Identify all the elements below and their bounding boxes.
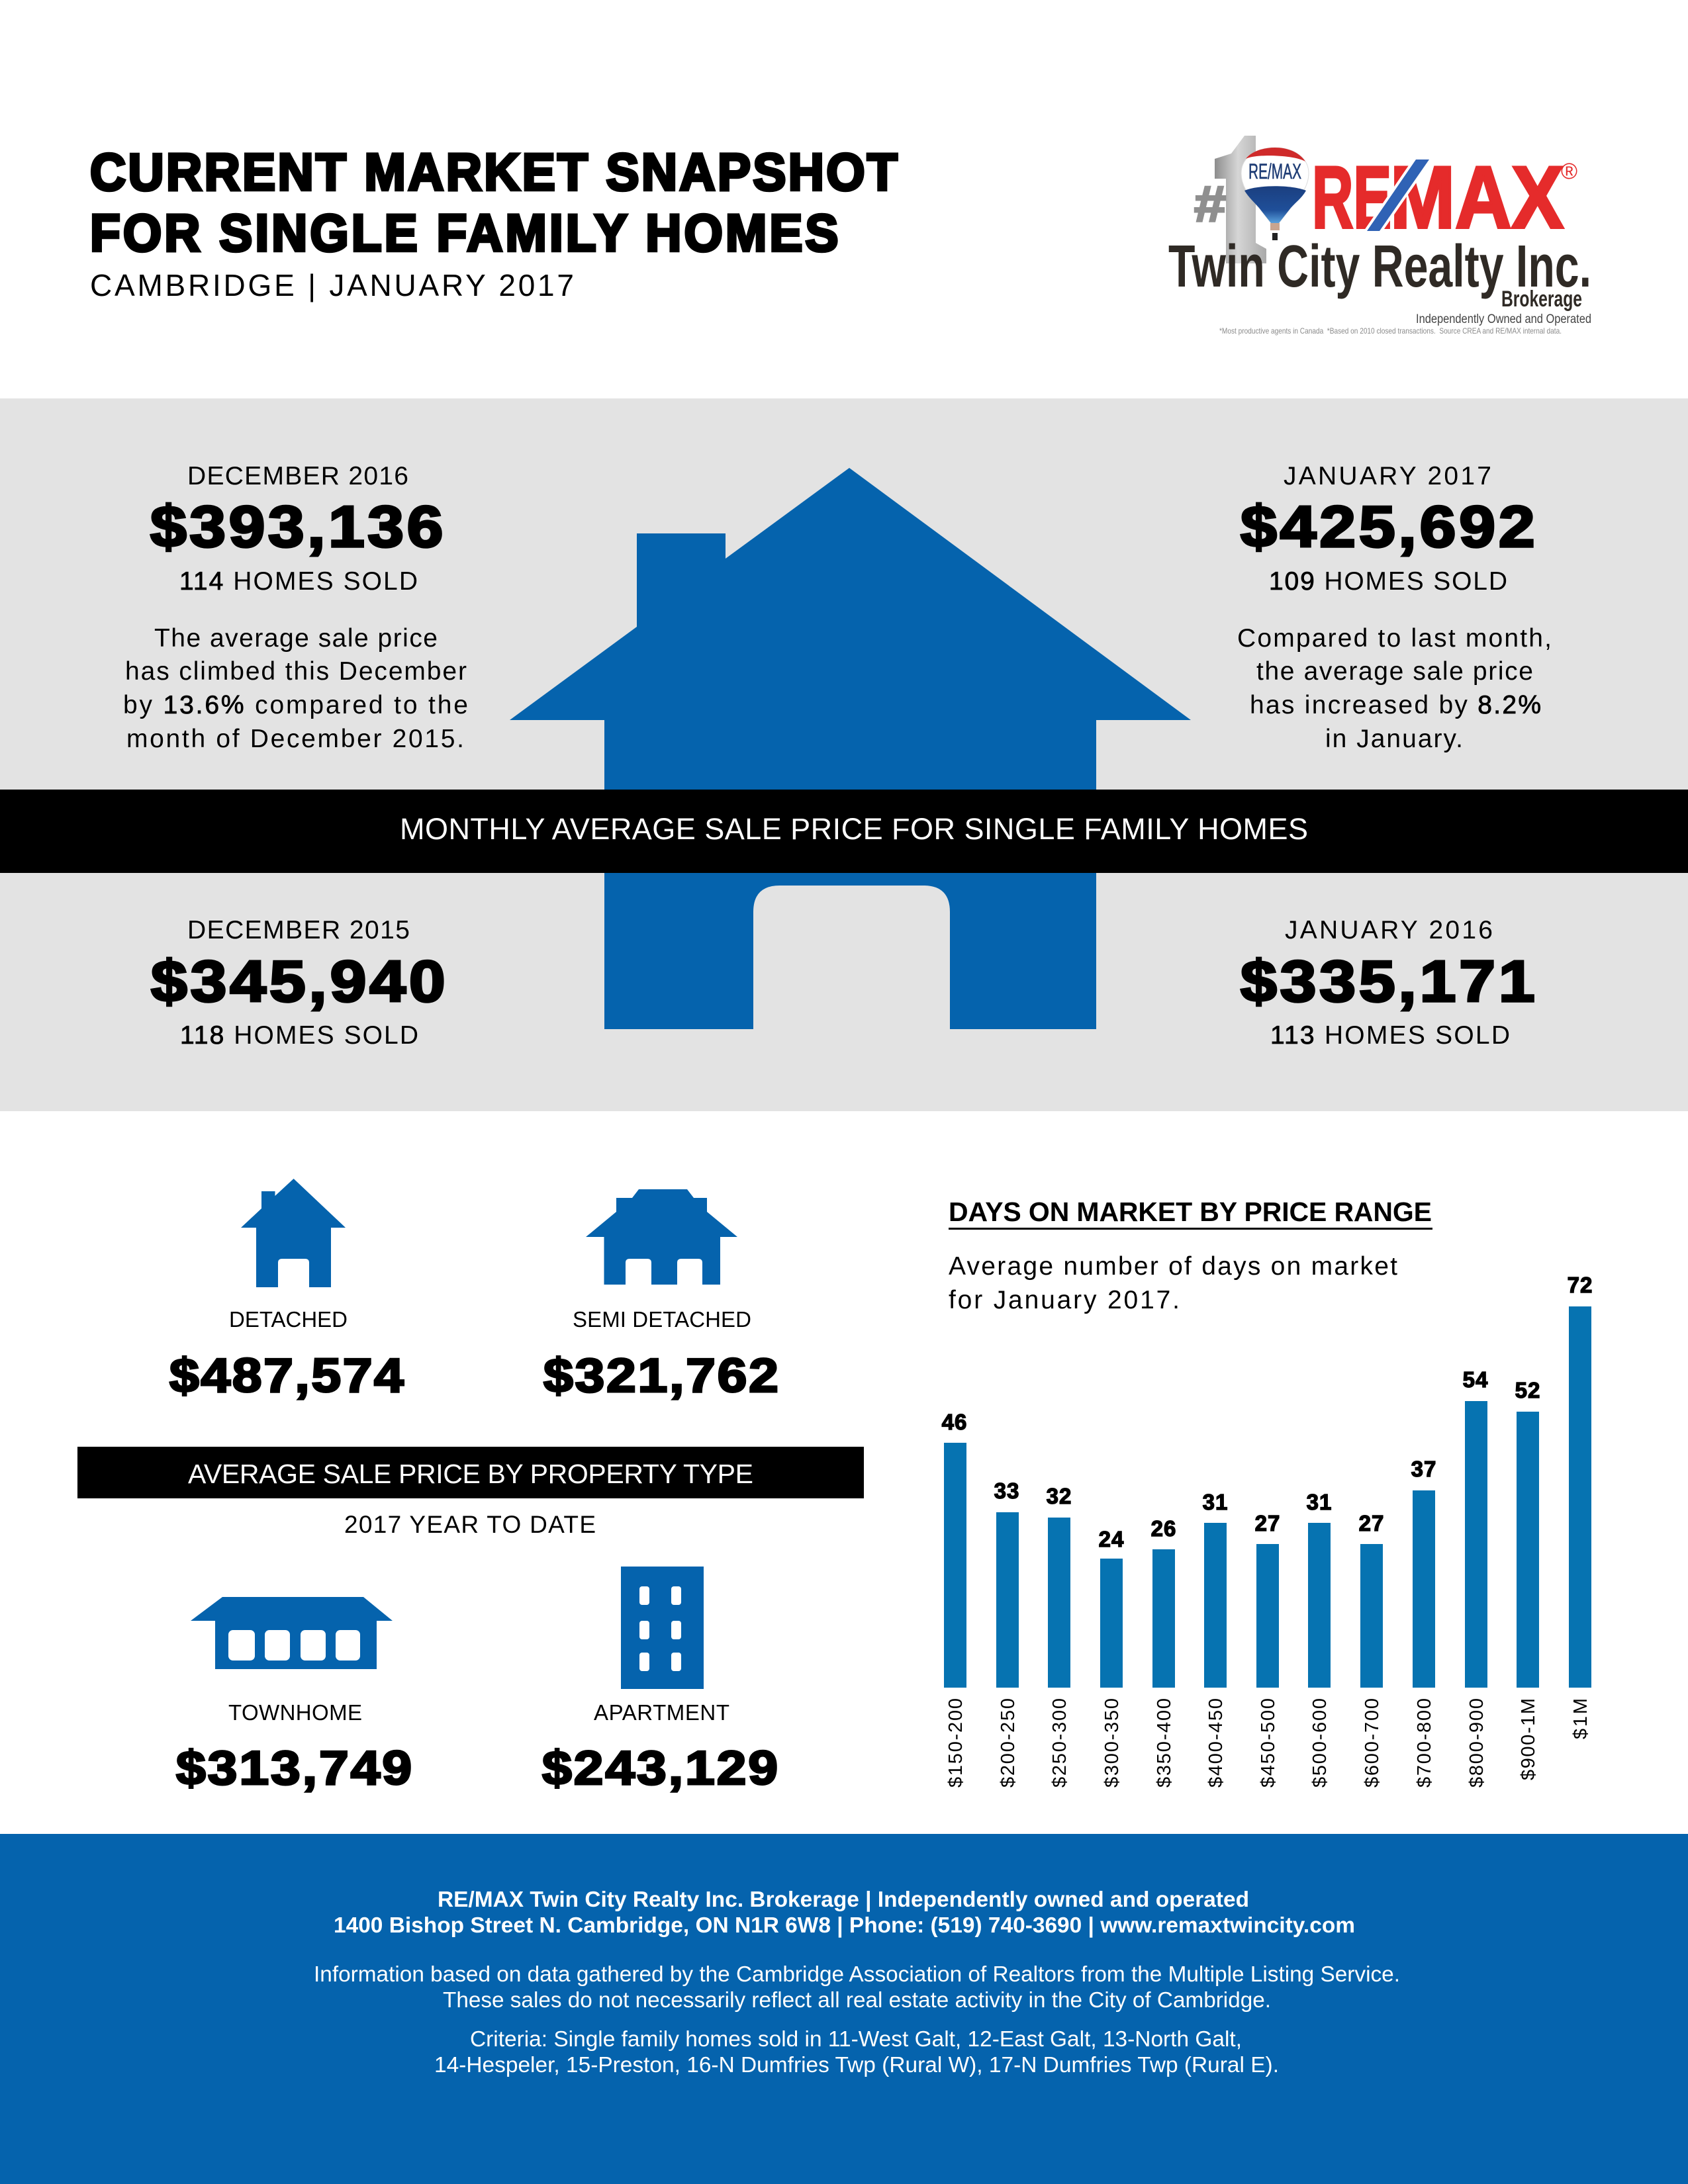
value labels	[942, 1273, 1593, 1551]
panel: monthly average sale price	[0, 398, 1688, 1111]
logo text: independently owned: Independently Owned and Operated	[1416, 312, 1591, 326]
axis labels: $1M	[1570, 1698, 1591, 1739]
footer	[0, 1834, 1688, 2184]
footer background	[0, 1834, 1688, 2184]
price: $321,762	[543, 1349, 778, 1402]
value labels: 24	[1099, 1527, 1124, 1551]
stat: January 2016	[1241, 916, 1535, 1050]
text: January paragraph: the average sale price	[1256, 657, 1533, 686]
logo fine print: *Most productive agents in Canada *Based on 2010 closed transactions. Source CREA and RE/MAX internal data.	[1219, 326, 1562, 336]
logo text: Brokerage: Brokerage	[1501, 287, 1582, 312]
panel: property types	[77, 1179, 864, 1795]
stat: December 2015: $345,940	[151, 948, 445, 1014]
icon: apartment building	[621, 1567, 704, 1689]
bars	[944, 1306, 1591, 1688]
stat: December 2016: DECEMBER 2016	[187, 462, 408, 490]
text: December paragraph	[123, 624, 468, 753]
title	[90, 143, 898, 262]
chart description: Average number of days on market	[949, 1252, 1397, 1281]
value labels: 31	[1307, 1490, 1332, 1514]
price: $243,129	[542, 1742, 778, 1795]
value labels: 72	[1568, 1273, 1593, 1297]
text: December paragraph: has climbed this December	[125, 657, 467, 686]
value labels: 32	[1047, 1484, 1072, 1508]
logo icon: silver number one: #	[1194, 176, 1226, 232]
stat: January 2016: 113 HOMES SOLD	[1270, 1021, 1510, 1050]
stat: December 2016: $393,136	[150, 494, 443, 559]
title: CURRENT MARKET SNAPSHOT	[90, 143, 898, 201]
axis labels: $300-350	[1102, 1698, 1123, 1788]
black banner	[0, 790, 1688, 873]
footer criteria: Criteria: Single family homes sold in 11-West Galt, 12-East Galt, 13-North Galt,	[470, 2026, 1242, 2051]
axis labels: $450-500	[1258, 1698, 1279, 1788]
value labels: 33	[994, 1479, 1019, 1503]
axis labels: $800-900	[1466, 1698, 1487, 1788]
text: January paragraph: in January.	[1325, 725, 1463, 753]
value labels: 46	[942, 1410, 967, 1434]
axis labels: $400-450	[1205, 1698, 1227, 1788]
footer criteria	[434, 2026, 1279, 2077]
footer contact	[334, 1887, 1355, 1937]
bar chart	[942, 1273, 1593, 1788]
footer contact: RE/MAX Twin City Realty Inc. Brokerage | Independently owned and operated	[438, 1887, 1249, 1911]
stat: December 2015: DECEMBER 2015	[187, 916, 410, 944]
stat: December 2016	[150, 462, 443, 596]
axis labels: $150-200	[945, 1698, 966, 1788]
detached	[169, 1179, 404, 1402]
semi detached	[543, 1189, 778, 1402]
stat: December 2015: 118 HOMES SOLD	[180, 1021, 418, 1050]
footer contact: 1400 Bishop Street N. Cambridge, ON N1R 6W8 | Phone: (519) 740-3690 | www.remaxtwincity.com	[334, 1913, 1355, 1937]
text: January paragraph	[1237, 624, 1552, 753]
title: FOR SINGLE FAMILY HOMES	[90, 204, 839, 262]
icon: large house	[510, 468, 1191, 1029]
townhome	[176, 1597, 412, 1795]
logo wordmark: RE/MAX	[1312, 149, 1577, 247]
stat: January 2017	[1241, 462, 1535, 596]
panel: days on market	[942, 1197, 1593, 1788]
value labels: 27	[1255, 1511, 1280, 1535]
value labels: 37	[1411, 1457, 1436, 1481]
logo icon: silver number one	[1194, 136, 1266, 263]
text: December paragraph: by 13.6% compared to the	[123, 691, 468, 719]
icon: townhome	[191, 1597, 393, 1669]
axis labels: $250-300	[1049, 1698, 1070, 1788]
axis labels: $200-250	[998, 1698, 1019, 1788]
label: TOWNHOME	[228, 1700, 362, 1725]
text: January paragraph: has increased by 8.2%	[1250, 691, 1541, 719]
chart description: for January 2017.	[949, 1286, 1180, 1314]
label: SEMI DETACHED	[573, 1307, 751, 1332]
stat: December 2016: 114 HOMES SOLD	[179, 567, 418, 596]
footer information: Information based on data gathered by the Cambridge Association of Realtors from the Multiple Listing Service.	[314, 1962, 1400, 1986]
text: December paragraph: month of December 2015.	[126, 725, 464, 753]
axis labels: $700-800	[1414, 1698, 1435, 1788]
stat: January 2017: 109 HOMES SOLD	[1269, 567, 1507, 596]
text: year to date: 2017 YEAR TO DATE	[344, 1511, 596, 1538]
chart description	[949, 1252, 1397, 1314]
value labels: 31	[1203, 1490, 1228, 1514]
black banner: AVERAGE SALE PRICE BY PROPERTY TYPE	[188, 1459, 753, 1489]
logo: RE/MAX Twin City Realty	[1168, 136, 1591, 336]
icon: semi detached house	[586, 1189, 737, 1285]
axis labels: $600-700	[1362, 1698, 1383, 1788]
black banner: MONTHLY AVERAGE SALE PRICE FOR SINGLE FAMILY HOMES	[400, 812, 1308, 846]
text: January paragraph: Compared to last month,	[1237, 624, 1552, 653]
grey band	[0, 398, 1688, 1111]
axis labels: $350-400	[1154, 1698, 1175, 1788]
icon: detached house	[241, 1179, 346, 1287]
subtitle: CAMBRIDGE | JANUARY 2017	[90, 268, 574, 302]
axis labels: $900-1M	[1518, 1698, 1539, 1780]
value labels: 54	[1463, 1367, 1488, 1392]
value labels: 27	[1359, 1511, 1384, 1535]
stat: December 2015	[151, 916, 445, 1050]
logo wordmark: RE/MAX: ®	[1561, 159, 1577, 184]
axis labels: $500-600	[1309, 1698, 1331, 1788]
label: DETACHED	[229, 1307, 348, 1332]
stat: January 2017: $425,692	[1241, 494, 1535, 559]
apartment	[542, 1567, 778, 1795]
stat: January 2016: JANUARY 2016	[1285, 916, 1493, 944]
logo wordmark: RE/MAX: RE	[1312, 149, 1391, 247]
chart heading: DAYS ON MARKET BY PRICE RANGE	[949, 1197, 1432, 1227]
logo icon: hot air balloon: RE/MAX	[1248, 159, 1301, 183]
footer information: These sales do not necessarily reflect all real estate activity in the City of Cambridge.	[443, 1987, 1271, 2012]
value labels: 26	[1151, 1516, 1176, 1541]
text: December paragraph: The average sale price	[154, 624, 438, 653]
logo wordmark: RE/MAX: MAX	[1390, 149, 1564, 247]
price: $313,749	[176, 1742, 412, 1795]
price: $487,574	[169, 1349, 404, 1402]
footer information	[314, 1962, 1400, 2012]
logo icon: hot air balloon	[1241, 148, 1309, 240]
footer criteria: 14-Hespeler, 15-Preston, 16-N Dumfries Twp (Rural W), 17-N Dumfries Twp (Rural E).	[434, 2052, 1279, 2077]
axis labels	[945, 1698, 1591, 1788]
value labels: 52	[1515, 1378, 1540, 1402]
stat: January 2017: JANUARY 2017	[1284, 462, 1491, 490]
label: APARTMENT	[594, 1700, 729, 1725]
black banner	[77, 1447, 864, 1498]
stat: January 2016: $335,171	[1241, 948, 1535, 1014]
